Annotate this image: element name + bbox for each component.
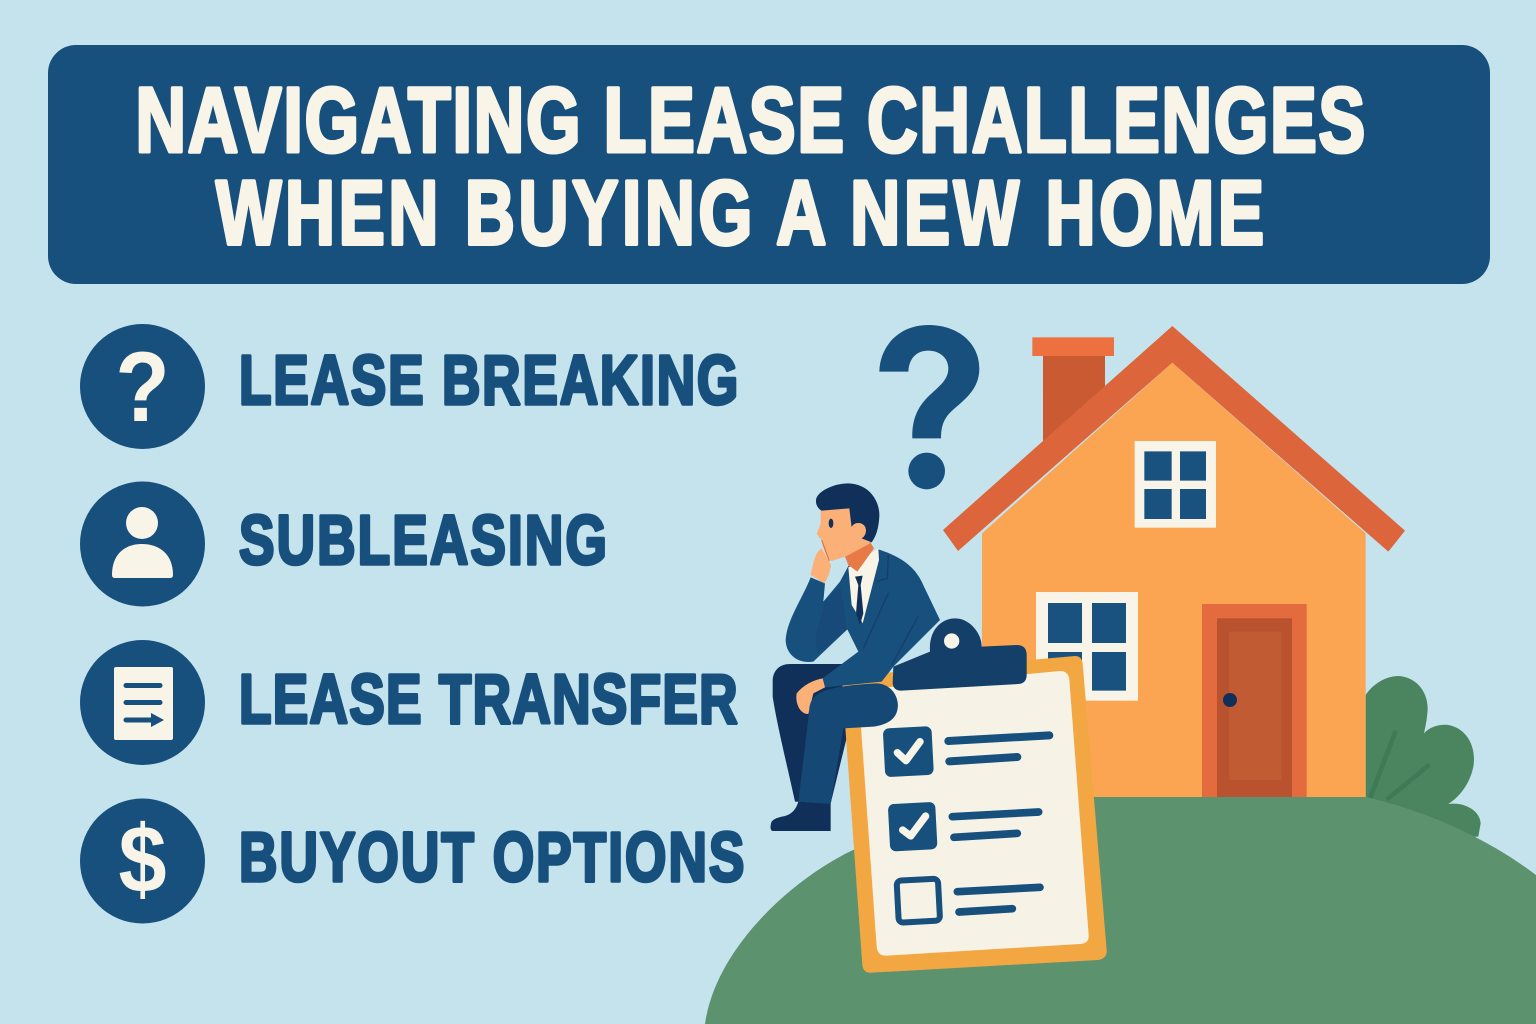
label: buyout options: BUYOUT OPTIONS bbox=[239, 819, 744, 897]
man: front leg bbox=[798, 683, 898, 804]
icon: dollar sign bbox=[80, 798, 205, 924]
checklist row 1 bbox=[883, 726, 1049, 777]
man: hand on knee bbox=[796, 678, 825, 714]
man: arm shading bbox=[815, 586, 847, 653]
man: eye bbox=[829, 519, 833, 528]
item: subleasing bbox=[80, 482, 607, 606]
man: ear bbox=[851, 523, 866, 538]
icon: question mark bbox=[80, 324, 205, 449]
clipboard board bbox=[842, 656, 1107, 973]
item: lease transfer bbox=[80, 640, 738, 765]
icon: person bbox=[80, 482, 205, 606]
icon: dollar sign: $ bbox=[118, 806, 167, 913]
man: mouth line bbox=[822, 540, 829, 561]
title banner bbox=[48, 45, 1490, 284]
icon: document with arrow bbox=[80, 640, 205, 765]
icon: large question mark bbox=[879, 325, 979, 489]
chimney bbox=[1032, 337, 1114, 443]
clipboard clip bbox=[893, 618, 1027, 691]
label: subleasing: SUBLEASING bbox=[239, 502, 607, 580]
title line 1: NAVIGATING LEASE CHALLENGES bbox=[136, 69, 1365, 172]
label: lease breaking: LEASE BREAKING bbox=[239, 342, 738, 420]
banner panel bbox=[48, 45, 1490, 284]
lower window bbox=[1036, 592, 1138, 701]
man: hair bbox=[816, 483, 879, 542]
man: shirt bbox=[848, 548, 879, 623]
man: upper body bbox=[786, 483, 940, 687]
upper window bbox=[1135, 441, 1216, 528]
man: back leg and shoe bbox=[771, 664, 860, 831]
man: neck bbox=[845, 542, 874, 572]
man: hand on chin bbox=[811, 548, 831, 583]
label: lease transfer: LEASE TRANSFER bbox=[239, 661, 738, 739]
man and clipboard bbox=[771, 483, 1107, 973]
bush bbox=[1366, 676, 1481, 840]
house wall bbox=[982, 363, 1366, 800]
list of lease options bbox=[80, 324, 744, 924]
man: suit jacket bbox=[786, 549, 940, 687]
roof bbox=[943, 326, 1405, 552]
man: tie bbox=[855, 576, 863, 625]
man: face bbox=[817, 508, 870, 561]
item: lease breaking bbox=[80, 324, 738, 449]
title line 2: WHEN BUYING A NEW HOME bbox=[216, 163, 1264, 264]
item: buyout options bbox=[80, 798, 744, 924]
checklist row 2 bbox=[888, 802, 1039, 852]
door bbox=[1202, 604, 1307, 801]
icon: question mark: ? bbox=[115, 332, 170, 442]
clipboard paper bbox=[858, 671, 1089, 956]
checklist row 3 bbox=[897, 879, 1040, 923]
man: suit seams bbox=[863, 555, 918, 665]
house bbox=[943, 326, 1405, 801]
green hill bbox=[705, 797, 1536, 1024]
